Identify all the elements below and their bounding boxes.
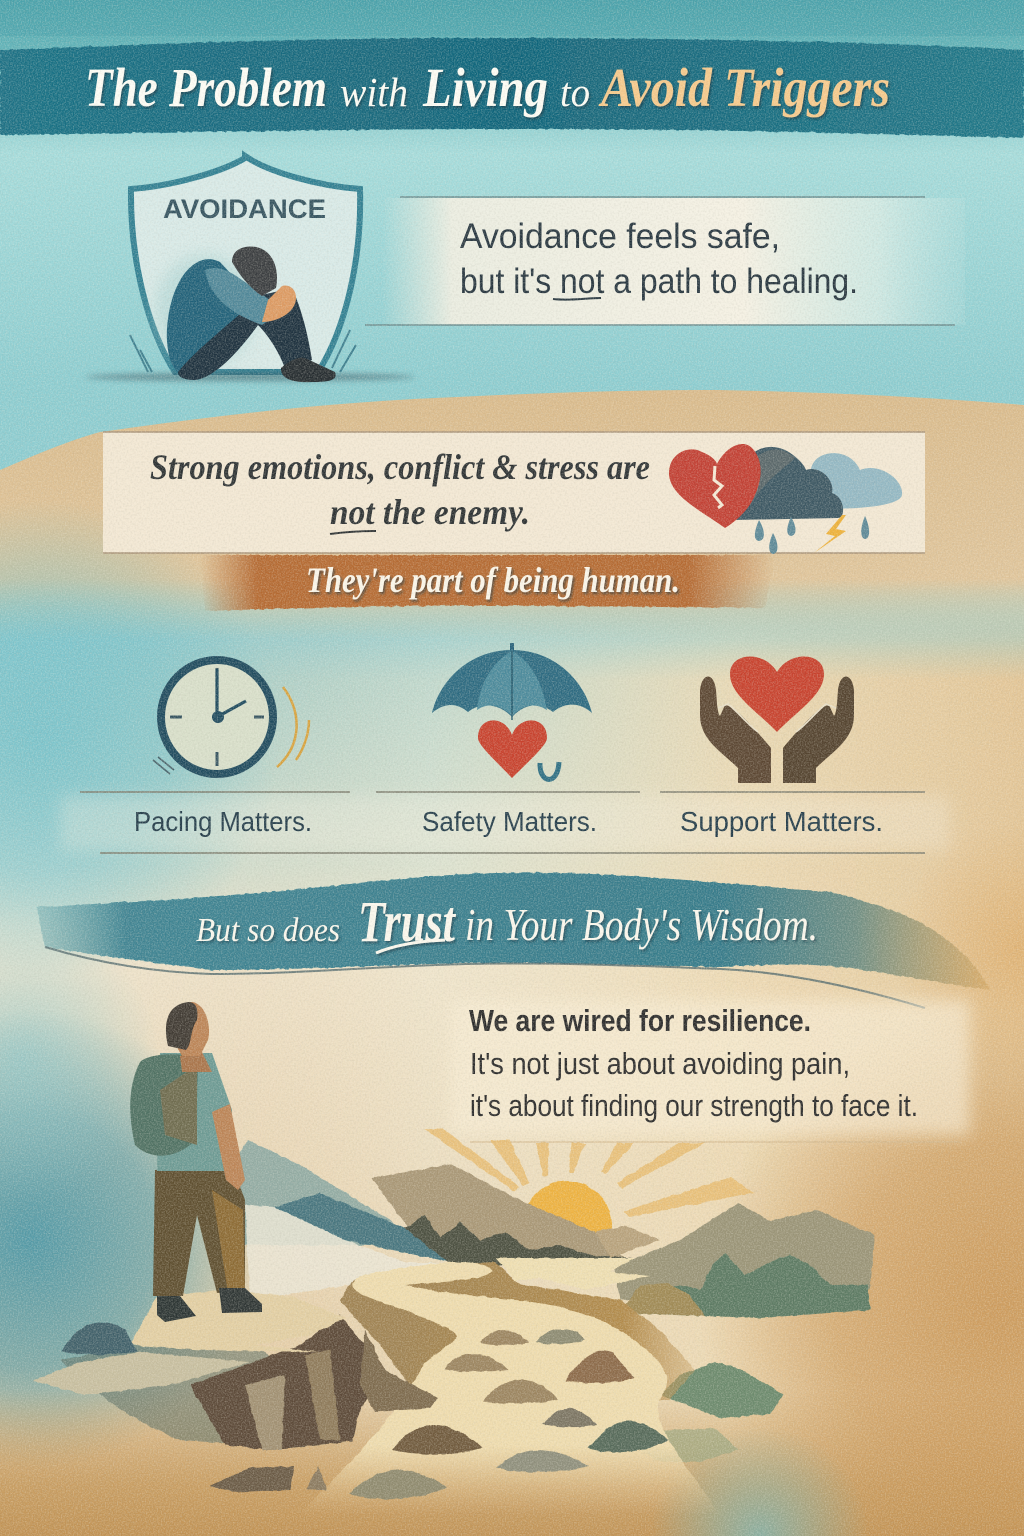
icon: broken heart — [669, 444, 761, 528]
landscape: sun and mountains — [232, 1129, 875, 1300]
lake — [496, 1258, 650, 1290]
emotions text: not the enemy. — [330, 492, 530, 532]
icon: umbrella over heart — [432, 643, 592, 779]
title text: Living — [422, 57, 548, 118]
trousers — [153, 1165, 245, 1296]
title text: Avoid Triggers — [598, 57, 890, 118]
resilience lines — [469, 1003, 918, 1123]
banner: part of being human — [200, 555, 775, 611]
panel: avoidance statement — [365, 197, 965, 325]
arm — [212, 1104, 245, 1190]
boots — [157, 1296, 196, 1322]
resilience lines: It's not just about avoiding pain, — [470, 1046, 850, 1081]
statement text: but it's not a path to healing. — [460, 262, 858, 301]
title banner — [0, 38, 1024, 138]
sunrays — [424, 1129, 754, 1217]
emotions text — [150, 447, 650, 534]
title text: The Problem — [85, 57, 327, 118]
trust text: But so does — [196, 912, 340, 949]
shoe — [281, 357, 336, 382]
backpack — [130, 1054, 198, 1156]
head — [232, 246, 277, 296]
figure hugging knees — [85, 246, 415, 382]
brush banner: trust — [36, 873, 990, 1008]
panel: resilience text — [450, 1000, 970, 1142]
title text: with — [340, 69, 408, 115]
label: support: Support Matters. — [680, 806, 883, 837]
trust text: in Your Body's Wisdom. — [465, 900, 818, 950]
icon: storm clouds — [733, 447, 902, 554]
resilience lines: We are wired for resilience. — [469, 1003, 811, 1038]
mist below hiker — [245, 1205, 455, 1300]
statement text: Avoidance feels safe, — [460, 217, 780, 256]
back — [167, 259, 255, 374]
distant mountains — [232, 1140, 410, 1245]
trust text — [196, 889, 818, 954]
label: pacing: Pacing Matters. — [134, 806, 312, 837]
shield with seated person — [85, 156, 415, 382]
shirt — [157, 1053, 232, 1171]
trust text: Trust — [358, 889, 456, 954]
emotions text: Strong emotions, conflict & stress are — [150, 447, 650, 487]
shield label: AVOIDANCE — [163, 194, 326, 224]
icon: clock — [153, 660, 309, 774]
legs — [178, 288, 312, 380]
head — [167, 1002, 209, 1056]
row of matters labels — [60, 792, 950, 853]
cream path — [300, 1262, 720, 1515]
arm — [205, 268, 272, 325]
landscape: winding path — [209, 1258, 720, 1515]
title text: to — [560, 69, 590, 115]
label: safety: Safety Matters. — [422, 806, 597, 837]
icon: hands holding heart — [700, 656, 854, 783]
statement text — [460, 217, 858, 301]
cliff ledge — [33, 1290, 438, 1450]
sun — [522, 1181, 612, 1271]
panel: strong emotions — [103, 432, 925, 554]
landscape: trees on the right — [620, 1253, 870, 1462]
stepping stones — [209, 1329, 669, 1499]
hiker with backpack — [130, 1002, 262, 1322]
banner text: They're part of being human. — [306, 560, 680, 600]
title text — [85, 57, 890, 118]
resilience lines: it's about finding our strength to face it. — [470, 1088, 918, 1123]
brown banks — [340, 1262, 695, 1400]
